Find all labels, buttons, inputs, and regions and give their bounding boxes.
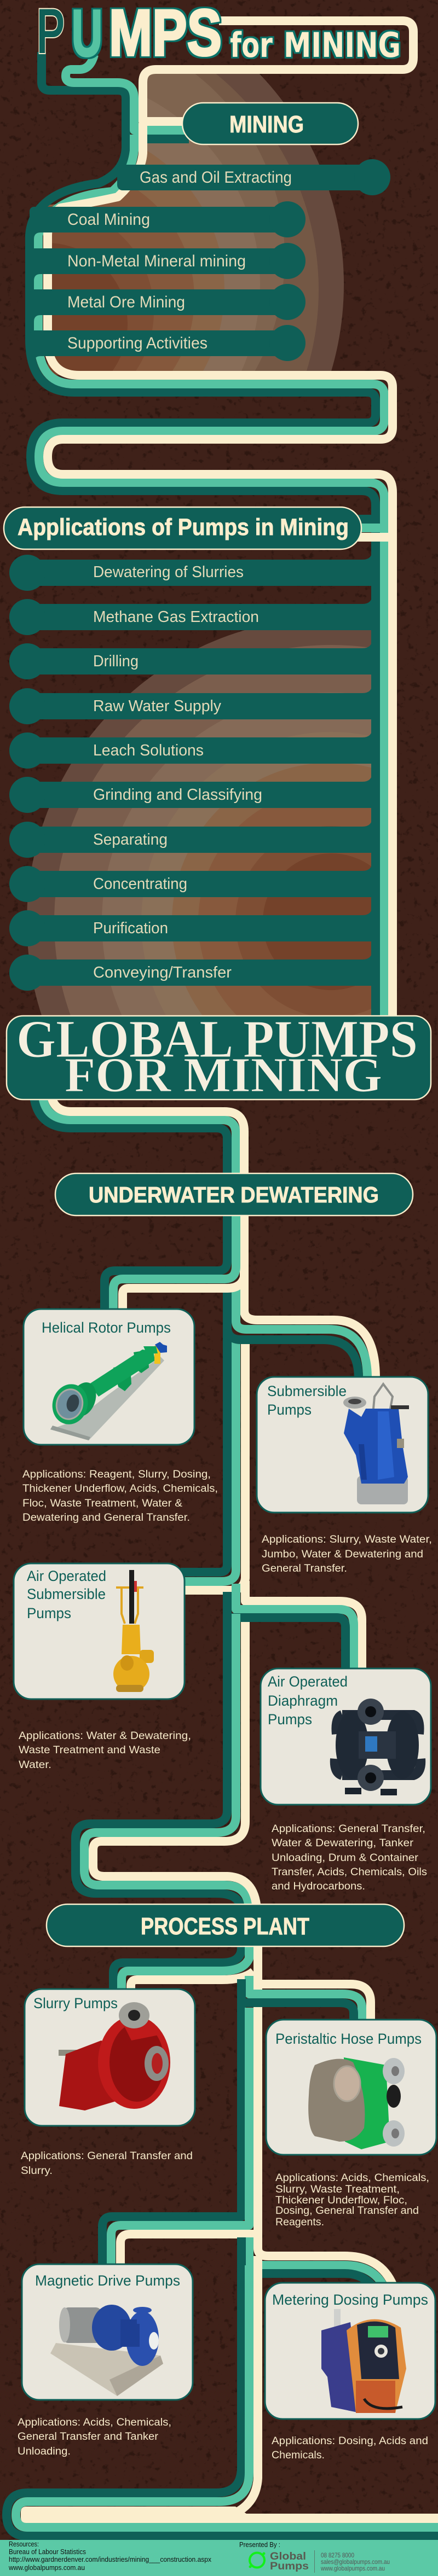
card: metering dosing pumps	[265, 2283, 435, 2419]
text: slurry applications: Slurry.	[21, 2165, 53, 2177]
concentric rings behind applications list	[27, 630, 371, 1015]
item: purification: Purification	[93, 920, 168, 937]
pipes: global pumps to underwater dewatering	[34, 1097, 244, 1176]
text: peristaltic applications: Applications: Acids, Chemicals,	[275, 2172, 429, 2184]
text: submersible applications	[262, 1534, 432, 1574]
icon: metering pump	[321, 2309, 406, 2413]
item: gas and oil: Gas and Oil Extracting	[140, 168, 292, 187]
item: coal	[30, 201, 306, 237]
text: helical applications: Floc, Waste Treatment, Water &	[22, 1498, 182, 1509]
item: separating	[9, 822, 376, 858]
text: peristaltic applications: Dosing, General Transfer and	[275, 2205, 419, 2217]
icon: air operated submersible pump	[113, 1570, 154, 1692]
text: peristaltic applications: Slurry, Waste Treatment,	[275, 2184, 400, 2195]
card: submersible pumps	[257, 1377, 428, 1513]
icon: submersible pump	[343, 1384, 409, 1504]
contact details	[320, 2551, 390, 2572]
heading pill: mining	[182, 103, 358, 144]
card: peristaltic hose pumps	[266, 2020, 436, 2155]
item: non-metal: Non-Metal Mineral mining	[67, 252, 246, 270]
pipes: title to mining pill	[42, 21, 413, 139]
text: diaphragm applications: Applications: General Transfer,	[272, 1823, 425, 1835]
item: dewatering: Dewatering of Slurries	[93, 563, 244, 581]
footer resources	[8, 2540, 211, 2572]
footer resources: www.globalpumps.com.au	[8, 2563, 85, 2572]
item: conveying	[9, 955, 376, 991]
banner: global pumps for mining: FOR MINING	[65, 1048, 382, 1102]
item: drilling: Drilling	[93, 653, 139, 670]
text: air operated submersible applications	[19, 1730, 191, 1771]
item: metal ore: Metal Ore Mining	[67, 293, 185, 311]
text: air operated submersible applications: Applications: Water & Dewatering,	[19, 1730, 191, 1742]
card: slurry pumps	[25, 1989, 195, 2126]
icon: helical rotor pump	[48, 1342, 167, 1440]
item: leach: Leach Solutions	[93, 742, 204, 759]
footer resources: Resources:	[9, 2540, 39, 2548]
footer resources: Bureau of Labour Statistics	[9, 2548, 86, 2556]
item: raw water	[9, 688, 376, 724]
heading pill: mining: MINING	[229, 111, 304, 138]
heading pill: applications	[4, 507, 361, 549]
card: magnetic drive pumps	[22, 2264, 193, 2400]
item: methane	[9, 599, 376, 635]
item: grinding: Grinding and Classifying	[93, 786, 262, 804]
text: diaphragm applications: Unloading, Drum & Container	[272, 1852, 419, 1864]
contact details: www.globalpumps.com.au	[320, 2565, 385, 2572]
card: helical rotor pumps	[24, 1309, 194, 1445]
text: helical applications: Thickener Underflow, Acids, Chemicals,	[22, 1483, 218, 1495]
card: air operated submersible pumps: Submersible	[27, 1586, 106, 1602]
banner: global pumps for mining: GLOBAL PUMPS	[16, 1010, 418, 1069]
card: submersible pumps: Pumps	[267, 1402, 312, 1418]
item: purification	[9, 910, 376, 946]
text: metering applications	[272, 2435, 428, 2461]
presented by: Presented By :	[239, 2540, 280, 2549]
item: raw water: Raw Water Supply	[93, 697, 221, 715]
heading pill: underwater dewatering	[55, 1173, 413, 1216]
card: helical rotor pumps: Helical Rotor Pumps	[42, 1319, 171, 1336]
card: air operated diaphragm pumps: Air Operated	[268, 1673, 348, 1690]
text: diaphragm applications	[272, 1823, 427, 1892]
text: metering applications: Applications: Dosing, Acids and	[272, 2435, 428, 2447]
text: helical applications: Applications: Reagent, Slurry, Dosing,	[22, 1469, 211, 1480]
card: air operated diaphragm pumps	[261, 1668, 431, 1805]
text: slurry applications: Applications: General Transfer and	[21, 2150, 193, 2162]
card: metering dosing pumps: Metering Dosing Pumps	[272, 2292, 428, 2308]
text: magnetic applications	[18, 2417, 171, 2457]
title word for: for	[230, 25, 273, 65]
item: drilling	[9, 643, 376, 679]
icon: magnetic drive pump	[50, 2305, 163, 2396]
pipes: process plant branches	[102, 1942, 393, 2286]
logo: global pumps: Pumps	[270, 2561, 309, 2572]
heading pill: process plant	[47, 1904, 404, 1946]
card: air operated submersible pumps	[14, 1563, 185, 1699]
text: submersible applications: General Transfer.	[262, 1563, 347, 1574]
item: conveying: Conveying/Transfer	[93, 964, 232, 981]
mining list	[30, 159, 390, 363]
text: air operated submersible applications: Water.	[19, 1759, 51, 1771]
text: magnetic applications: Unloading.	[18, 2446, 71, 2457]
card: magnetic drive pumps: Magnetic Drive Pumps	[35, 2272, 180, 2289]
heading pill: process plant: PROCESS PLANT	[141, 1913, 309, 1940]
icon: diaphragm pump	[335, 1699, 420, 1795]
text: diaphragm applications: Transfer, Acids, Chemicals, Oils	[272, 1866, 427, 1878]
contact details: sales@globalpumps.com.au	[321, 2558, 390, 2566]
pipes: mining to applications	[30, 123, 397, 1017]
card: submersible pumps: Submersible	[267, 1383, 347, 1399]
contact details: 08 8275 8000	[321, 2551, 354, 2559]
item: methane: Methane Gas Extraction	[93, 608, 259, 626]
item: non-metal	[30, 243, 306, 279]
text: diaphragm applications: Water & Dewatering, Tanker	[272, 1837, 414, 1849]
pipes: underwater branches	[105, 1213, 376, 1590]
text: helical applications: Dewatering and General Transfer.	[22, 1512, 190, 1523]
card: air operated diaphragm pumps: Pumps	[268, 1711, 312, 1728]
banner: global pumps for mining	[7, 1010, 431, 1102]
text: slurry applications	[21, 2150, 193, 2177]
footer resources: http://www.gardnerdenver.com/industries/mining___construction.aspx	[9, 2555, 211, 2563]
card: peristaltic hose pumps: Peristaltic Hose Pumps	[275, 2031, 422, 2047]
text: peristaltic applications	[275, 2172, 429, 2228]
text: peristaltic applications: Thickener Underflow, Floc,	[275, 2195, 407, 2206]
pipes: lower underwater branch to process plant	[76, 1581, 362, 1909]
text: magnetic applications: General Transfer and Tanker	[18, 2431, 159, 2443]
applications list	[9, 550, 376, 991]
heading pill: underwater dewatering: UNDERWATER DEWATERING	[89, 1182, 379, 1207]
item: grinding	[9, 777, 376, 813]
item: separating: Separating	[93, 831, 168, 848]
card: slurry pumps: Slurry Pumps	[33, 1995, 118, 2011]
text: submersible applications: Jumbo, Water & Dewatering and	[262, 1549, 423, 1560]
icon: peristaltic pump	[308, 2057, 405, 2149]
text: magnetic applications: Applications: Acids, Chemicals,	[18, 2417, 171, 2428]
pipes: bottom sweep	[7, 2256, 438, 2536]
item: dewatering	[9, 555, 376, 591]
title word mining: MINING	[284, 25, 401, 65]
card: air operated diaphragm pumps: Diaphragm	[268, 1693, 338, 1709]
item: supporting	[30, 325, 306, 361]
item: coal: Coal Mining	[67, 211, 150, 229]
logo: global pumps: Global	[270, 2551, 306, 2562]
item: gas and oil	[117, 159, 390, 195]
text: air operated submersible applications: Waste Treatment and Waste	[19, 1745, 160, 1756]
footer	[0, 2540, 438, 2576]
card: air operated submersible pumps: Air Operated	[27, 1568, 106, 1584]
text: helical applications	[22, 1469, 218, 1523]
card: air operated submersible pumps: Pumps	[27, 1605, 71, 1621]
heading pill: applications: Applications of Pumps in Mining	[18, 514, 349, 540]
item: leach	[9, 732, 376, 769]
text: submersible applications: Applications: Slurry, Waste Water,	[262, 1534, 432, 1545]
icon: slurry pump	[59, 2002, 170, 2110]
item: supporting: Supporting Activities	[67, 334, 208, 352]
title	[36, 0, 401, 70]
text: diaphragm applications: and Hydrocarbons.	[272, 1881, 365, 1892]
logo: global pumps	[249, 2550, 315, 2573]
item: metal ore	[30, 284, 306, 320]
item: concentrating	[9, 866, 376, 902]
text: metering applications: Chemicals.	[272, 2450, 325, 2461]
text: peristaltic applications: Reagents.	[275, 2217, 324, 2228]
item: concentrating: Concentrating	[93, 875, 187, 893]
concentric rings behind mining list	[48, 69, 344, 375]
